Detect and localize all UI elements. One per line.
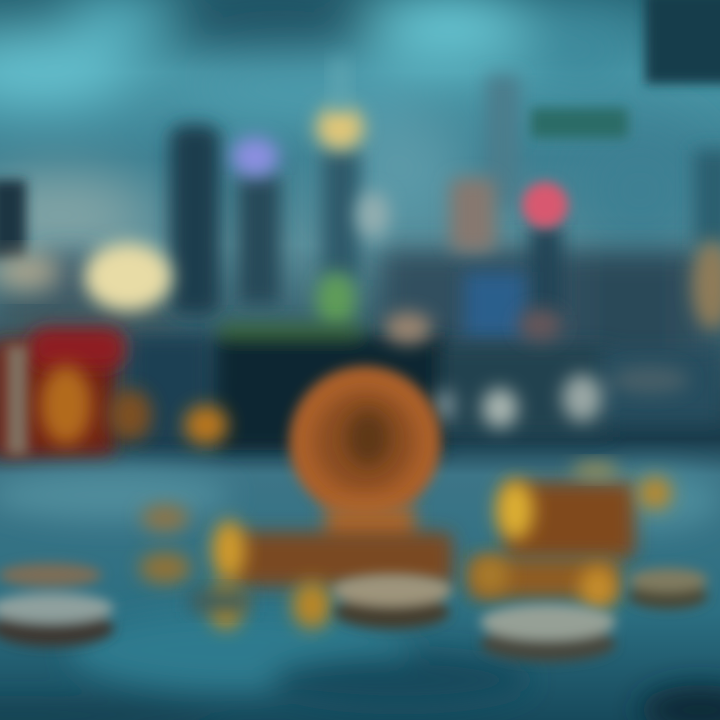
pale small tower <box>356 191 390 239</box>
right coin cup <box>470 462 672 610</box>
top right dark panel <box>645 0 720 84</box>
right edge tower <box>694 150 720 250</box>
green sign <box>530 108 628 138</box>
purple topped tower <box>231 137 280 305</box>
red topped tower <box>522 182 568 315</box>
flat silver coins <box>0 563 708 662</box>
central coin stack <box>139 504 453 629</box>
far right coin <box>628 568 708 609</box>
right coin <box>480 604 616 662</box>
lit windows <box>384 309 690 428</box>
blue building <box>464 272 526 338</box>
storm clouds <box>0 0 710 260</box>
dark waterfront buildings <box>130 324 720 450</box>
red and orange building <box>0 328 228 458</box>
distant skyline <box>0 250 710 380</box>
grey tall tower <box>486 75 520 205</box>
left edge dark building <box>0 180 26 260</box>
towers <box>0 60 720 338</box>
large copper coin <box>289 366 441 545</box>
table surface highlights <box>0 470 720 720</box>
centre coin <box>332 574 452 629</box>
tall dark tower <box>170 125 220 315</box>
left coin stack <box>0 563 114 647</box>
yellow topped spire <box>316 60 364 328</box>
glowing moon <box>0 243 172 311</box>
right orange glow <box>692 240 720 330</box>
tan building <box>450 178 496 252</box>
